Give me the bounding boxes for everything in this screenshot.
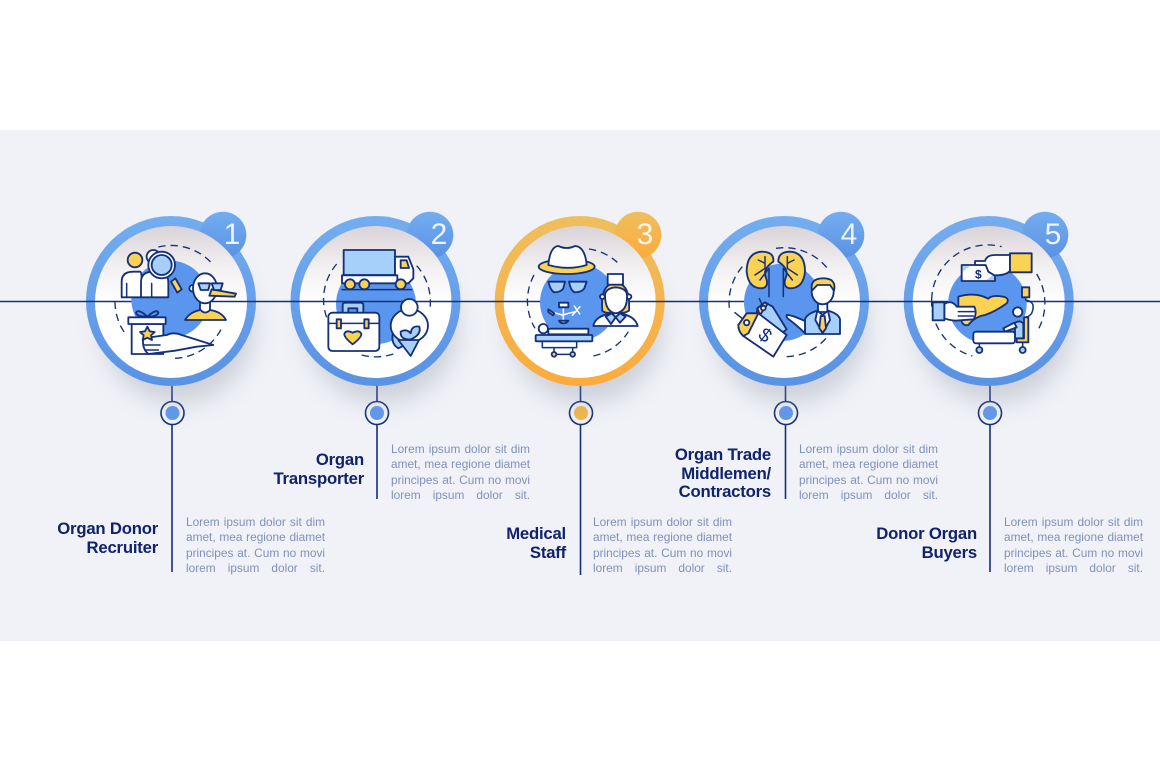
text: step 2: principes at. Cum no movi xyxy=(391,473,530,487)
ring: step 5 xyxy=(904,212,1074,403)
heading: step 3: Medical xyxy=(506,524,566,543)
heading: step 1: Organ Donor xyxy=(57,519,158,538)
text: step 1 xyxy=(186,515,325,575)
heading: step 2: Organ xyxy=(316,450,364,469)
icon: step 2 organ transporter xyxy=(324,250,430,357)
heading: step 1 xyxy=(57,519,158,557)
text: step 5: Lorem ipsum dolor sit dim xyxy=(1004,515,1143,529)
number badges: 2 xyxy=(431,218,447,251)
text: step 2: amet, mea regione diamet xyxy=(391,457,530,471)
icon: step 4 trade middlemen: $ xyxy=(754,324,776,348)
text: step 1: lorem ipsum dolor sit. xyxy=(186,561,325,575)
text: step 4 xyxy=(799,442,938,502)
heading: step 4: Contractors xyxy=(679,482,771,501)
text: step 4: amet, mea regione diamet xyxy=(799,457,938,471)
heading: step 5: Buyers xyxy=(922,543,977,562)
text: step 2: lorem ipsum dolor sit. xyxy=(391,488,530,502)
text: step 4: Lorem ipsum dolor sit dim xyxy=(799,442,938,456)
text: step 3: principes at. Cum no movi xyxy=(593,546,732,560)
icon: step 1 donor recruiter xyxy=(115,245,236,358)
ring: step 4 xyxy=(699,212,869,403)
icon: step 4 trade middlemen xyxy=(729,248,840,357)
heading: step 2: Transporter xyxy=(273,469,364,488)
text: step 5: amet, mea regione diamet xyxy=(1004,530,1143,544)
text: step 3: lorem ipsum dolor sit. xyxy=(593,561,732,575)
number badges: 4 xyxy=(841,218,857,251)
heading: step 4 xyxy=(675,445,771,501)
text: step 3: amet, mea regione diamet xyxy=(593,530,732,544)
text: step 4: principes at. Cum no movi xyxy=(799,473,938,487)
text: step 1: Lorem ipsum dolor sit dim xyxy=(186,515,325,529)
heading: step 5: Donor Organ xyxy=(876,524,977,543)
number badges xyxy=(224,218,1061,251)
ring: step 1 xyxy=(86,212,256,403)
ring: step 3 xyxy=(495,212,665,403)
text: step 5: lorem ipsum dolor sit. xyxy=(1004,561,1143,575)
connector lines and nodes xyxy=(161,380,1002,575)
heading: step 3 xyxy=(506,524,566,562)
text: step 5: principes at. Cum no movi xyxy=(1004,546,1143,560)
heading: step 5 xyxy=(876,524,977,562)
horizontal timeline line xyxy=(0,300,1160,302)
heading: step 2 xyxy=(273,450,364,488)
heading: step 4: Middlemen/ xyxy=(681,464,771,483)
text: step 5 xyxy=(1004,515,1143,575)
heading: step 4: Organ Trade xyxy=(675,445,771,464)
text: step 2 xyxy=(391,442,530,502)
icon: step 3 medical staff xyxy=(527,246,638,357)
text: step 2: Lorem ipsum dolor sit dim xyxy=(391,442,530,456)
icon: step 5 organ buyers xyxy=(932,245,1045,356)
icon: step 5 organ buyers: $ xyxy=(975,268,982,282)
background panel xyxy=(0,130,1160,641)
heading: step 3: Staff xyxy=(530,543,566,562)
text: step 3: Lorem ipsum dolor sit dim xyxy=(593,515,732,529)
text: step 1: principes at. Cum no movi xyxy=(186,546,325,560)
number badges: 1 xyxy=(224,218,240,251)
number badges: 5 xyxy=(1045,218,1061,251)
number badges: 3 xyxy=(637,218,653,251)
text: step 3 xyxy=(593,515,732,575)
text: step 1: amet, mea regione diamet xyxy=(186,530,325,544)
heading: step 1: Recruiter xyxy=(87,538,158,557)
text: step 4: lorem ipsum dolor sit. xyxy=(799,488,938,502)
ring: step 2 xyxy=(290,212,460,403)
